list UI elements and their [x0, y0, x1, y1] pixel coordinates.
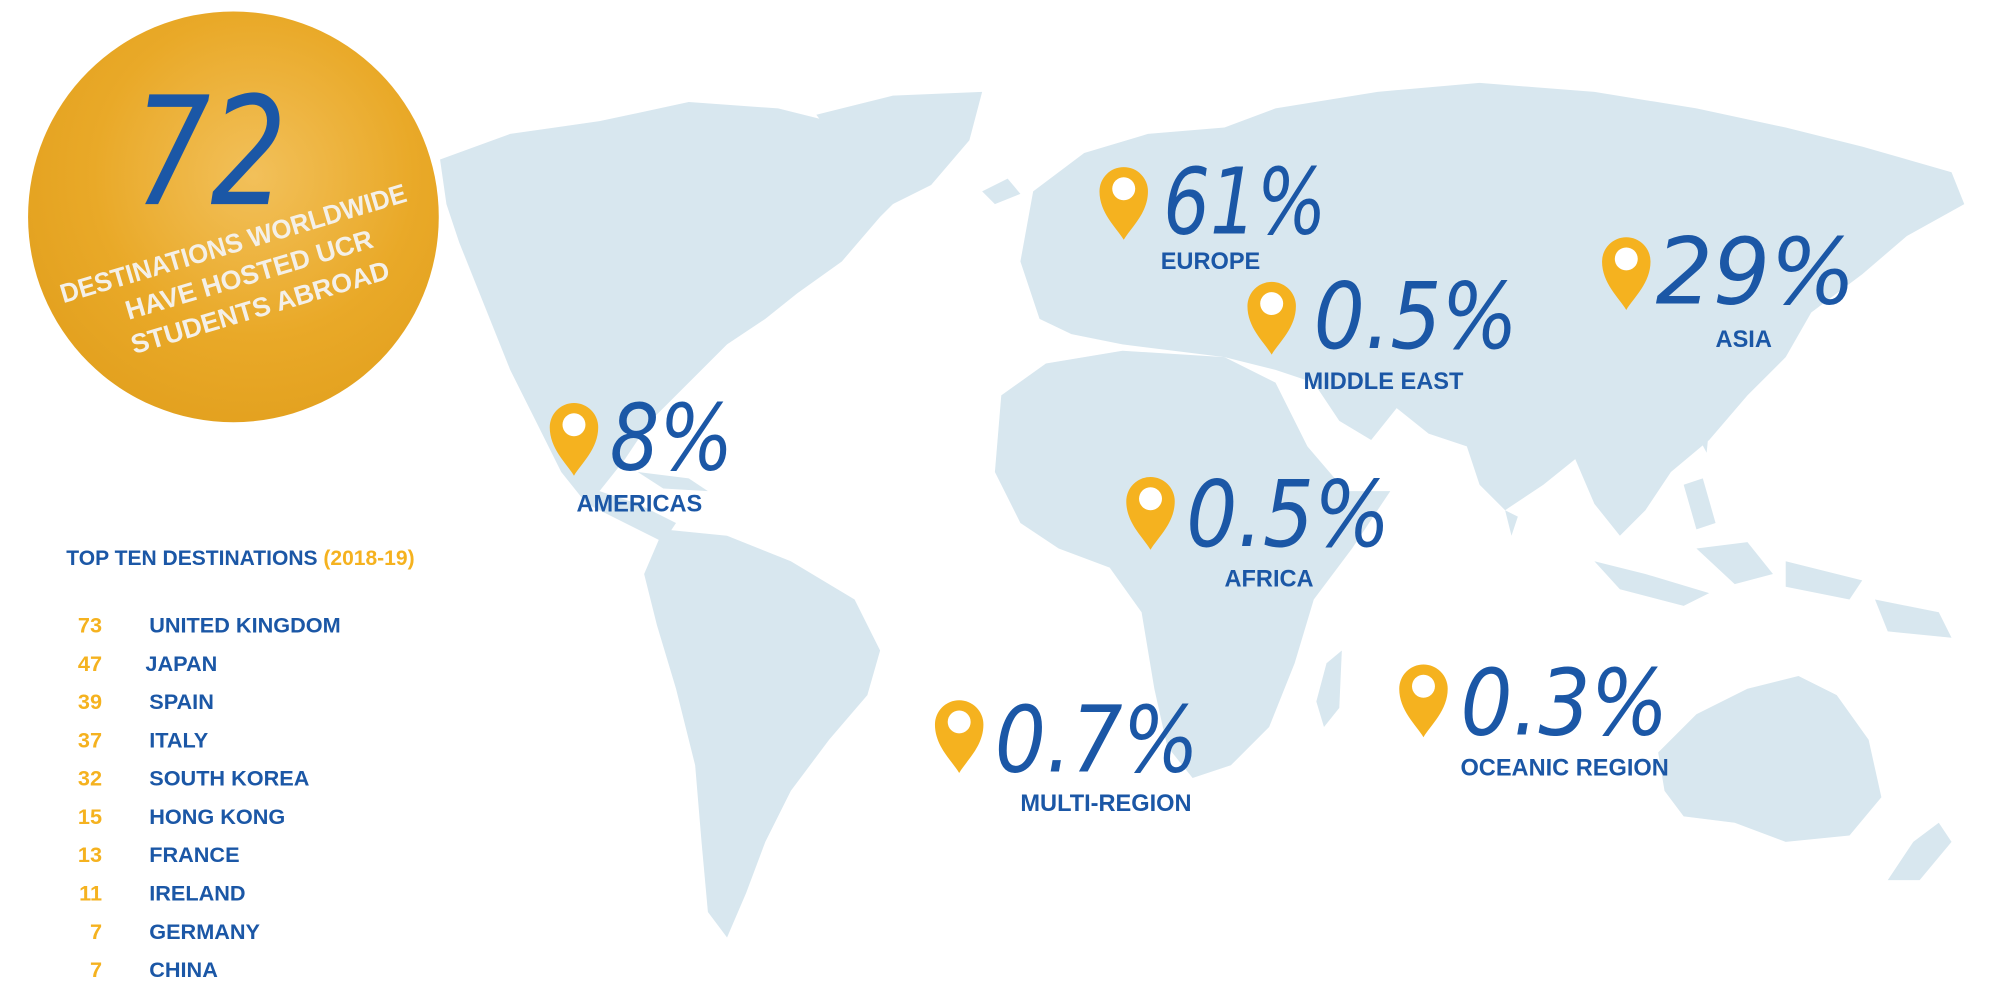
badge text: DESTINATIONS WORLDWIDE [57, 178, 410, 309]
indonesia [1594, 542, 1862, 606]
top ten list: SPAIN [149, 689, 214, 714]
marker: africa: AFRICA [1224, 566, 1314, 592]
marker: middle east: 0.5% [1314, 263, 1518, 370]
top ten list: 13 [78, 842, 102, 867]
japan [1741, 293, 1786, 389]
marker: americas: 8% [610, 384, 733, 491]
eurasia [1020, 83, 1964, 536]
top ten list: 37 [78, 727, 102, 752]
top ten list: GERMANY [149, 919, 261, 944]
number 72: 72 [134, 65, 287, 240]
top ten list: 7 [90, 919, 102, 944]
top ten list: 32 [78, 766, 102, 791]
marker: oceanic [1399, 650, 1669, 781]
africa [995, 351, 1390, 778]
marker: africa [1126, 461, 1390, 592]
new zealand [1888, 823, 1952, 880]
madagascar [1316, 651, 1342, 727]
marker: multi-region: 0.7% [995, 687, 1199, 794]
badge circle: 72 destinations [28, 11, 439, 422]
top ten list: 39 [78, 689, 102, 714]
top ten list: UNITED KINGDOM [149, 613, 341, 638]
marker: africa: 0.5% [1186, 461, 1390, 568]
marker: multi-region: MULTI-REGION [1020, 790, 1192, 816]
marker: oceanic: OCEANIC REGION [1460, 755, 1669, 781]
top ten list: SOUTH KOREA [149, 766, 310, 791]
badge text: HAVE HOSTED UCR [122, 224, 377, 326]
marker: europe [1099, 148, 1327, 274]
top ten list: 7 [90, 957, 102, 982]
top ten list [66, 547, 415, 982]
top ten list: 11 [79, 881, 102, 906]
australia [1658, 676, 1881, 842]
top ten list: JAPAN [145, 651, 217, 676]
top ten list: CHINA [149, 957, 218, 982]
badge text: STUDENTS ABROAD [127, 255, 393, 360]
world map [440, 83, 1964, 938]
marker: americas [550, 384, 733, 516]
marker: europe: 61% [1163, 148, 1327, 255]
small islands [638, 179, 1952, 638]
top ten list: ITALY [149, 727, 209, 752]
top ten list: IRELAND [149, 881, 246, 906]
top ten list: FRANCE [149, 842, 240, 867]
uk [1043, 217, 1078, 274]
top ten list: 73 [78, 613, 102, 638]
marker: middle east: MIDDLE EAST [1304, 368, 1464, 394]
marker: middle east [1247, 263, 1518, 394]
top ten list: 47 [78, 651, 102, 676]
marker: europe: EUROPE [1161, 248, 1260, 274]
marker: oceanic: 0.3% [1460, 650, 1668, 757]
greenland [816, 92, 982, 210]
marker: asia: 29% [1656, 219, 1856, 326]
marker: asia: ASIA [1716, 326, 1772, 352]
list heading: TOP TEN DESTINATIONS (2018-19) [66, 547, 415, 570]
marker: multi-region [935, 687, 1199, 816]
south america [644, 529, 880, 938]
north america [440, 102, 918, 542]
badge text [57, 178, 430, 375]
marker: asia [1602, 219, 1856, 352]
top ten list: HONG KONG [149, 804, 285, 829]
marker: americas: AMERICAS [577, 490, 702, 516]
top ten list: 15 [78, 804, 102, 829]
